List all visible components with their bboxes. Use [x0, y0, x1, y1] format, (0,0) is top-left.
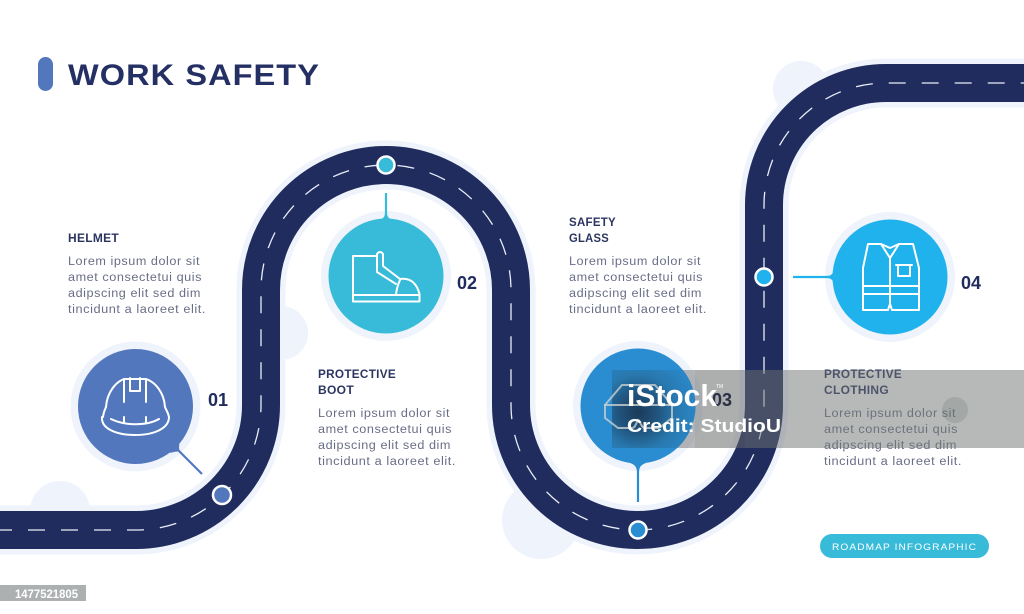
- text block: helmet: Lorem ipsum dolor sit: [68, 256, 200, 268]
- text block: safety glass: SAFETY: [569, 217, 616, 229]
- text block: protective clothing: amet consectetui quis: [824, 424, 958, 436]
- text block: safety glass: amet consectetui quis: [569, 272, 703, 284]
- step 04: vest badge: [793, 212, 955, 342]
- roadmap pill: ROADMAP INFOGRAPHIC: [832, 542, 977, 553]
- background blobs: [30, 61, 829, 559]
- text block: safety glass: Lorem ipsum dolor sit: [569, 256, 701, 268]
- text block: helmet: tincidunt a laoreet elit.: [68, 304, 206, 316]
- winding road: [0, 83, 1024, 530]
- roadmap pill: [820, 534, 989, 558]
- text block: protective clothing: tincidunt a laoreet elit.: [824, 456, 962, 468]
- text block: protective clothing: [824, 369, 962, 468]
- watermark credit: TM: [716, 384, 723, 390]
- title: WORK SAFETY: [68, 59, 320, 92]
- text block: safety glass: adipscing elit sed dim: [569, 288, 702, 300]
- text block: helmet: adipscing elit sed dim: [68, 288, 201, 300]
- icon: safety glass: [605, 385, 672, 428]
- road marker 02: [378, 156, 394, 174]
- road marker 03: [630, 522, 646, 538]
- number 02: 02: [457, 273, 477, 293]
- step 02: boot badge: [321, 193, 451, 341]
- text block: helmet: amet consectetui quis: [68, 272, 202, 284]
- text block: protective boot: PROTECTIVE: [318, 369, 396, 381]
- text block: helmet: [68, 233, 206, 316]
- road marker 01: [213, 486, 231, 504]
- watermark credit: [627, 378, 781, 436]
- text block: protective boot: BOOT: [318, 385, 354, 397]
- step 03: glass badge: [573, 341, 703, 502]
- road marker 04: [756, 268, 772, 286]
- text block: helmet: HELMET: [68, 233, 119, 245]
- image id tag: 1477521805: [15, 589, 79, 601]
- step 01: helmet badge: [70, 342, 202, 474]
- number 03: 03: [712, 390, 732, 410]
- icon: helmet: [102, 378, 169, 435]
- image id tag: [0, 585, 86, 601]
- text block: protective boot: amet consectetui quis: [318, 424, 452, 436]
- number 01: 01: [208, 390, 228, 410]
- text block: protective boot: Lorem ipsum dolor sit: [318, 408, 450, 420]
- text block: protective clothing: CLOTHING: [824, 385, 889, 397]
- icon: boot: [353, 252, 420, 302]
- number 04: 04: [961, 273, 981, 293]
- text block: protective boot: adipscing elit sed dim: [318, 440, 451, 452]
- text block: safety glass: GLASS: [569, 233, 609, 245]
- text block: protective clothing: Lorem ipsum dolor sit: [824, 408, 956, 420]
- watermark credit: iStock: [627, 378, 718, 413]
- watermark banner: [612, 370, 1024, 448]
- text block: protective boot: [318, 369, 456, 468]
- watermark credit: Credit: StudioU: [627, 416, 781, 436]
- text block: protective clothing: adipscing elit sed dim: [824, 440, 957, 452]
- icon: vest: [863, 244, 919, 310]
- title marker: [38, 57, 53, 91]
- text block: safety glass: [569, 217, 707, 316]
- text block: protective clothing: PROTECTIVE: [824, 369, 902, 381]
- text block: safety glass: tincidunt a laoreet elit.: [569, 304, 707, 316]
- text block: protective boot: tincidunt a laoreet elit.: [318, 456, 456, 468]
